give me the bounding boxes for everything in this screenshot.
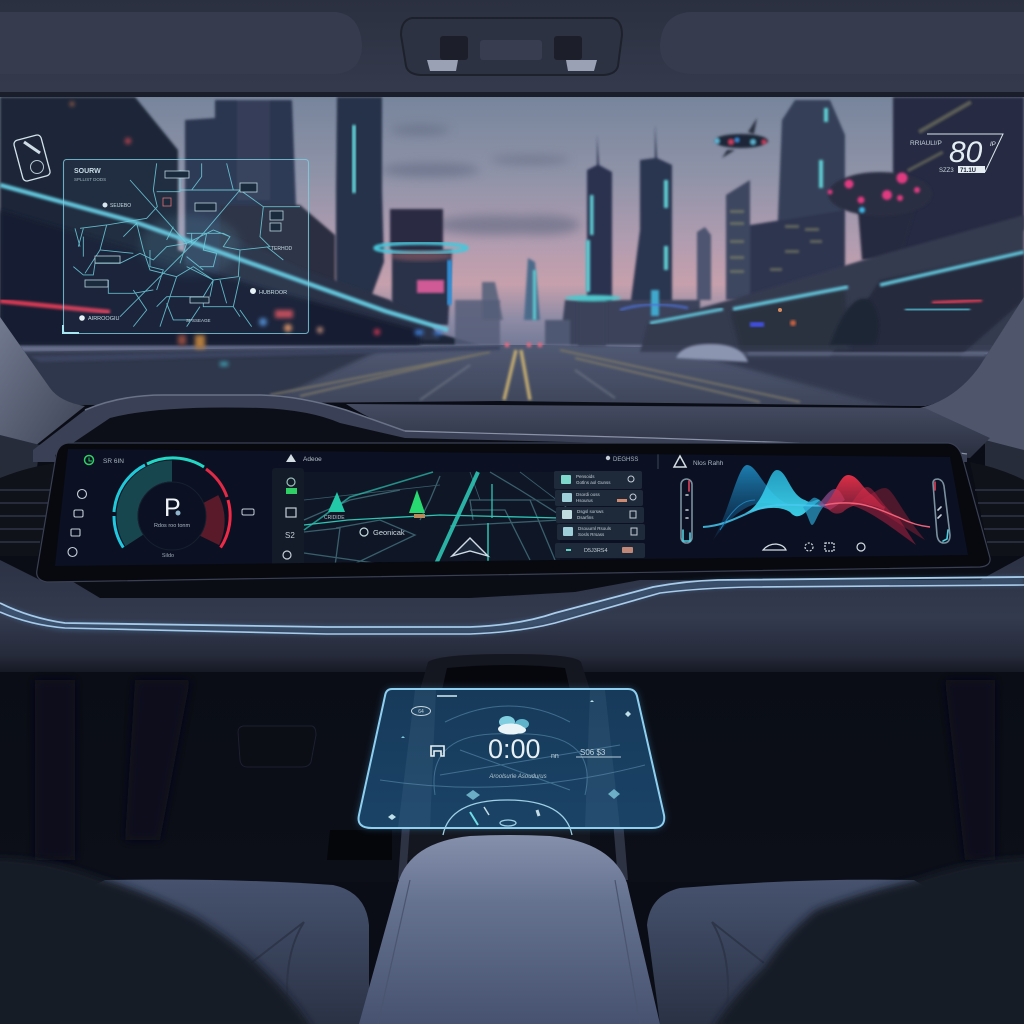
armrest [359,835,660,1024]
map labels: SOURW [74,168,101,175]
red waveform [818,475,930,545]
map labels [74,168,292,323]
teal position marker [324,492,345,521]
roof headliner [0,0,1024,97]
disc building ring [375,243,467,305]
nav chevron [452,538,488,556]
panel: navigation map [304,471,645,566]
map labels: HUBROOR [259,290,287,296]
overhead console [401,18,622,75]
left A-pillar [0,317,85,450]
seat icon [431,746,444,756]
destination list: Gotlns aol Gunss [576,480,611,485]
panel: sidebar icons [272,468,304,568]
destination list: Dsordi ooss [576,492,601,497]
sky [0,97,1024,357]
left foreground seat [0,858,313,1024]
distant disc and cars [504,295,621,348]
location label: Geonicak [373,528,405,537]
right monorail [620,215,1024,356]
teal speed streak [0,185,448,330]
map tags [85,171,283,303]
status diamonds [388,700,631,820]
panel: audio waves [674,456,950,551]
secondary readout: S06 $3 [580,748,606,757]
pedal [238,726,316,767]
map labels: TERHOD [271,246,292,252]
weather icon [498,716,529,734]
nav header [286,454,322,462]
speed gauge: Rdos roo tonm [154,523,190,529]
battery badge [412,706,430,716]
bottom icons [763,543,865,551]
dashboard top [33,395,990,470]
left control icons [68,490,86,556]
central display [50,445,980,570]
right guard rail [748,352,985,356]
left seat [0,880,369,1024]
right level bar [933,479,950,543]
visor left [0,12,362,74]
clouds [380,125,580,235]
right air vent [970,462,1024,556]
left air vent [0,463,58,556]
left guard rail [30,346,500,362]
unit label: nn [551,753,559,760]
HUD: speed readout: 71.1U [960,168,976,174]
map labels: SEIJEBO [110,203,131,209]
map roads [73,163,300,327]
flying vehicle [714,118,768,158]
blue waveform [703,465,825,540]
road [24,345,987,406]
HUD: speed readout: IP [990,142,996,148]
speed gauge [114,458,230,559]
right seat stitching [712,922,764,1024]
destination list: D5J3RS4 [584,548,608,554]
HUD: speed readout: RRIAULI/P [910,140,942,147]
wave header: Nlos Rahh [693,460,724,467]
lower dashboard trim [0,556,1024,680]
wave header [674,456,724,467]
destination list: Pensoids [576,474,595,479]
red speed streak [0,301,110,312]
recess below screen [70,580,640,598]
destination list: Dsarfins [577,515,594,520]
left monorail structure [312,279,438,340]
time readout: 0:00 [488,734,541,764]
windshield city view [0,97,1024,420]
map labels: SPLLIST DODS [74,177,106,182]
speed gauge: Sildo [162,553,174,559]
instrument hood [33,395,967,462]
destination list: Dsouurnl Rsouls [578,526,612,531]
lane markings [270,350,800,402]
indicator chip [242,509,254,515]
secondary readout [576,748,621,757]
console columns seen through glass [398,690,620,828]
destination list [554,471,645,558]
pink disc building [828,172,932,260]
dark road shoulders [0,350,1024,410]
map labels: AIRROOGIU [88,316,120,322]
nav status label [606,456,638,463]
left level bar [681,479,692,543]
center console tunnel [398,654,628,880]
side door panels [0,435,1024,520]
panel: gauge cluster [68,456,254,559]
tower light strips [533,108,828,320]
right A-pillar [920,297,1024,465]
destination list: Sosls Rrsass [578,532,605,537]
destination list: Hsourus [576,498,594,503]
HUD: speed readout: 80 [949,136,983,169]
HUD: speed readout: SZZ3 [939,168,954,174]
footwell [0,672,1024,882]
left lights [70,102,442,366]
right foreground seat [712,858,1024,1024]
right city buildings [524,97,1024,345]
visor right [660,12,1024,74]
grid arcs [380,706,645,795]
caption: Aroolsurle Asoudurus [488,774,547,780]
green route marker [409,490,425,518]
upper dash surface [346,404,990,458]
building windows [730,100,972,273]
speed gauge: P [164,494,181,522]
windshield haze [0,345,1024,415]
hood underside [55,407,950,470]
panel: sidebar icons: S2 [285,531,295,540]
map labels: SPSSEAGE [186,318,211,323]
status header [84,456,124,465]
HUD: speed readout [910,134,1003,174]
holographic display [359,689,664,835]
tower light strip [352,125,356,193]
nav status label: DEGHSS [613,457,638,463]
left city buildings [0,97,503,345]
instrument bezel [37,443,990,582]
status header: SR 6IN [103,458,124,465]
left seat stitching [251,922,304,1024]
nav header: Adeoe [303,456,322,463]
teal position marker: CRIDIDE [324,515,345,521]
HUD: route map panel [63,160,308,334]
battery badge: 64 [418,709,424,715]
white vehicle [676,344,748,362]
destination list: Dsgsl sorsws [577,509,604,514]
HUD: small icon tag [13,134,51,182]
right seat [647,880,1000,1024]
bottom dial [443,800,572,835]
